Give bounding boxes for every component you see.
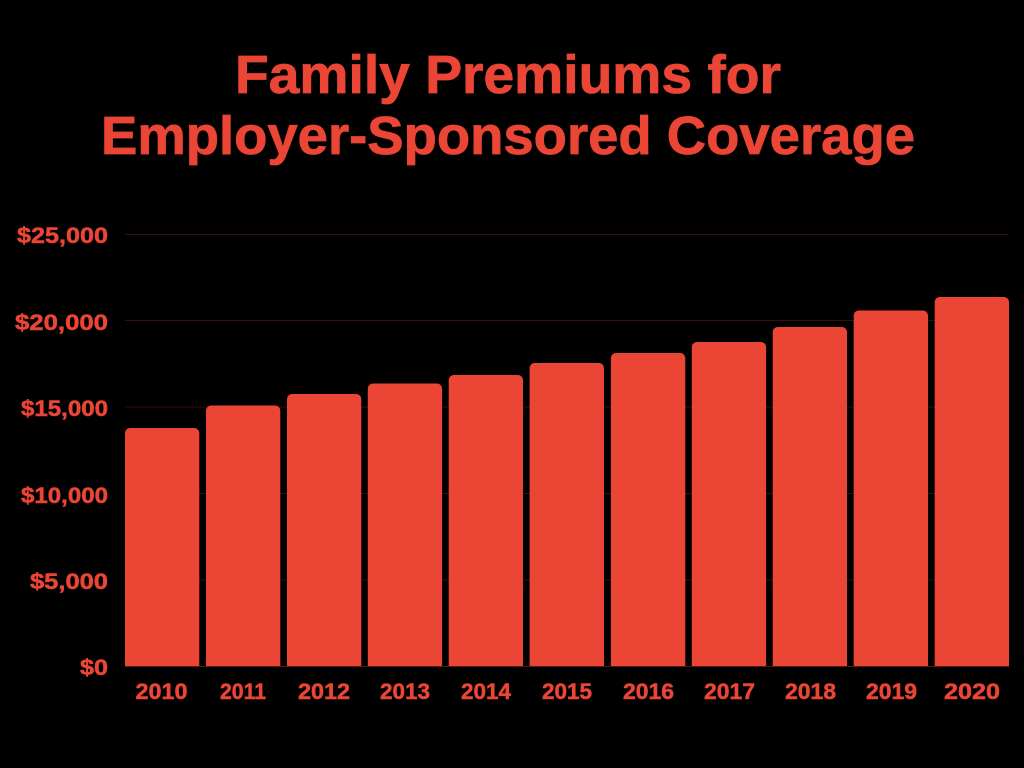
x-axis labels: 2018	[785, 679, 836, 704]
x-axis labels: 2017	[704, 679, 755, 704]
y-axis labels: $0	[80, 655, 108, 680]
bar: 2016	[611, 353, 685, 666]
bar: 2019	[854, 310, 928, 666]
x-axis labels: 2014	[461, 679, 512, 704]
y-axis labels: $20,000	[15, 310, 108, 335]
bar: 2013	[368, 384, 442, 666]
title	[101, 45, 915, 166]
x-axis labels: 2020	[944, 679, 1000, 704]
x-axis labels: 2016	[623, 679, 674, 704]
bar: 2020	[935, 297, 1009, 666]
bar: 2012	[287, 394, 361, 666]
x-axis labels: 2013	[380, 679, 430, 704]
bar: 2015	[530, 363, 604, 666]
title: Family Premiums for	[235, 45, 781, 105]
x-axis labels: 2015	[542, 679, 592, 704]
x-axis labels: 2012	[298, 679, 350, 704]
y-axis labels: $15,000	[21, 396, 108, 421]
bar: 2014	[449, 375, 523, 666]
bar: 2017	[692, 342, 766, 666]
x-axis labels: 2019	[866, 679, 917, 704]
y-axis labels: $10,000	[21, 483, 108, 508]
y-axis labels	[15, 223, 108, 680]
x-axis labels: 2011	[220, 679, 266, 704]
bar chart	[125, 297, 1009, 666]
bar: 2011	[206, 406, 280, 666]
title: Employer-Sponsored Coverage	[101, 106, 915, 166]
y-axis labels: $5,000	[30, 569, 108, 594]
x-axis labels	[136, 679, 1000, 704]
bar: 2018	[773, 327, 847, 666]
x-axis labels: 2010	[136, 679, 188, 704]
y-axis labels: $25,000	[17, 223, 108, 248]
bar: 2010	[125, 428, 199, 666]
